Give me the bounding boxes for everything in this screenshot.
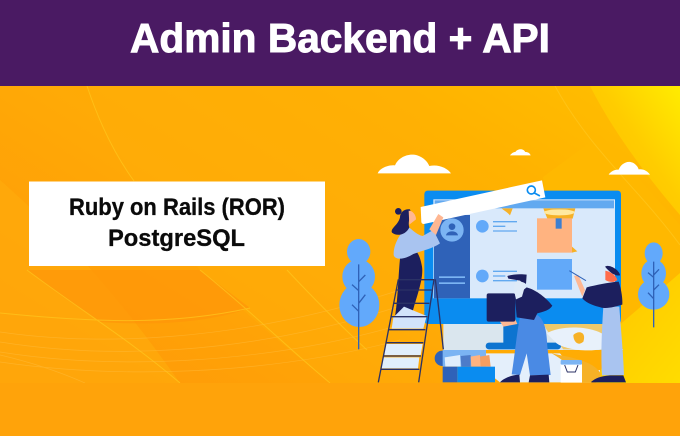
- title: Admin Backend + API: [130, 15, 550, 61]
- illustration: team building a web page: [339, 149, 669, 383]
- icon: right cloud: [609, 162, 650, 175]
- panel: technology stack: [29, 182, 325, 266]
- text: PostgreSQL: PostgreSQL: [108, 225, 245, 252]
- header bar: [0, 0, 680, 86]
- swatch box: [435, 350, 495, 382]
- sidebar with user avatar: [434, 215, 470, 298]
- person painting: [569, 266, 626, 382]
- orange content card: [502, 208, 577, 253]
- search bar: [421, 180, 545, 224]
- list item two: [476, 270, 517, 282]
- person with tablet: [487, 274, 552, 382]
- icon: small cloud: [510, 149, 531, 155]
- monitor: [424, 191, 621, 324]
- icon: magnifier: [527, 186, 539, 196]
- monitor stand and base: [443, 324, 623, 382]
- ladder panels: [381, 344, 423, 368]
- text: Ruby on Rails: Ruby on Rails (ROR): [69, 194, 285, 221]
- bottom band: [0, 383, 680, 436]
- ladder: [378, 279, 443, 382]
- background: orange wave panel: [0, 86, 680, 383]
- person on ladder: [392, 208, 443, 329]
- paint bucket: [561, 360, 582, 383]
- icon: left tree: [339, 239, 379, 349]
- blue content card: [537, 259, 572, 290]
- list item one: [476, 220, 517, 233]
- icon: large cloud: [378, 155, 451, 173]
- icon: right tree: [638, 242, 669, 327]
